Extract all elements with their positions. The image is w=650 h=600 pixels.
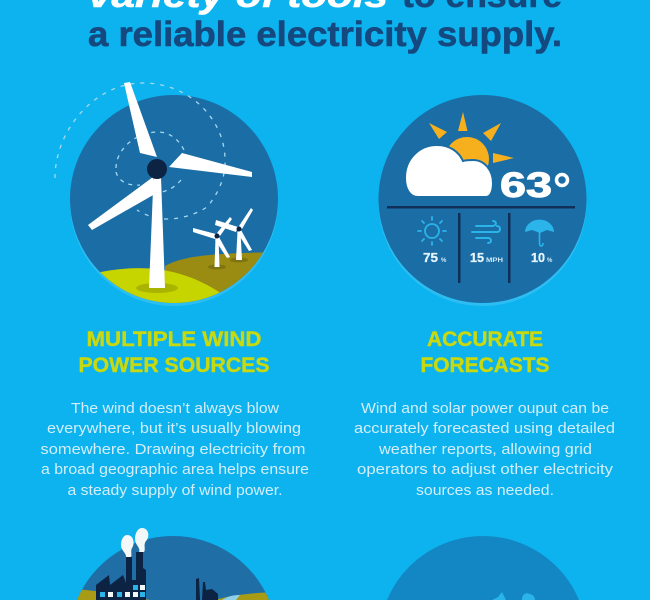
temperature xyxy=(500,166,568,205)
heading xyxy=(420,328,550,377)
text block: operators to adjust other electricity xyxy=(357,462,614,478)
icon: cloud xyxy=(405,145,493,197)
heading xyxy=(78,328,270,377)
text block: accurately forecasted using detailed xyxy=(354,421,615,437)
icon: weather widget circle xyxy=(378,95,586,306)
dividers xyxy=(387,206,575,283)
heading: MULTIPLE WIND xyxy=(86,328,262,351)
ground xyxy=(77,590,150,600)
stats: 10 xyxy=(531,250,545,265)
icon: umbrella xyxy=(525,220,554,246)
icon: wind turbines circle xyxy=(54,82,278,306)
text block: a broad geographic area helps ensure xyxy=(41,462,309,478)
heading: ACCURATE xyxy=(427,328,543,351)
stats: MPH xyxy=(486,258,503,264)
stats: % xyxy=(547,258,553,264)
small turbines xyxy=(193,208,253,267)
icon: factory xyxy=(96,552,146,600)
stats: % xyxy=(441,258,447,264)
text block: The wind doesn’t always blow xyxy=(71,401,280,417)
panel: skyline circle xyxy=(387,536,579,600)
title xyxy=(88,0,562,54)
icon: distant factory xyxy=(196,578,218,600)
text block: Wind and solar power ouput can be xyxy=(361,401,609,417)
icon: smoke xyxy=(121,528,148,558)
panel: accurate forecasts xyxy=(354,95,615,499)
panel: power plants circle xyxy=(77,528,269,600)
text block xyxy=(40,401,309,499)
text block: sources as needed. xyxy=(416,483,554,499)
text block: somewhere. Drawing electricity from xyxy=(40,442,306,458)
title: a reliable electricity supply. xyxy=(88,15,562,54)
icon: skyline peaks xyxy=(492,592,535,600)
big turbine xyxy=(88,82,252,288)
icon: wind xyxy=(472,221,500,243)
panel: multiple wind power sources xyxy=(40,82,309,499)
text block xyxy=(354,401,615,499)
stats: 15 xyxy=(470,250,484,265)
temperature: 63 xyxy=(500,166,552,205)
heading: FORECASTS xyxy=(420,354,550,377)
stats: 75 xyxy=(423,250,438,265)
heading: POWER SOURCES xyxy=(78,354,270,377)
stats xyxy=(423,250,553,265)
icon: small sun xyxy=(418,217,446,245)
text block: weather reports, allowing grid xyxy=(378,442,592,458)
text block: everywhere, but it’s usually blowing xyxy=(47,421,301,437)
icon: sun xyxy=(429,112,514,181)
text block: a steady supply of wind power. xyxy=(68,483,282,499)
